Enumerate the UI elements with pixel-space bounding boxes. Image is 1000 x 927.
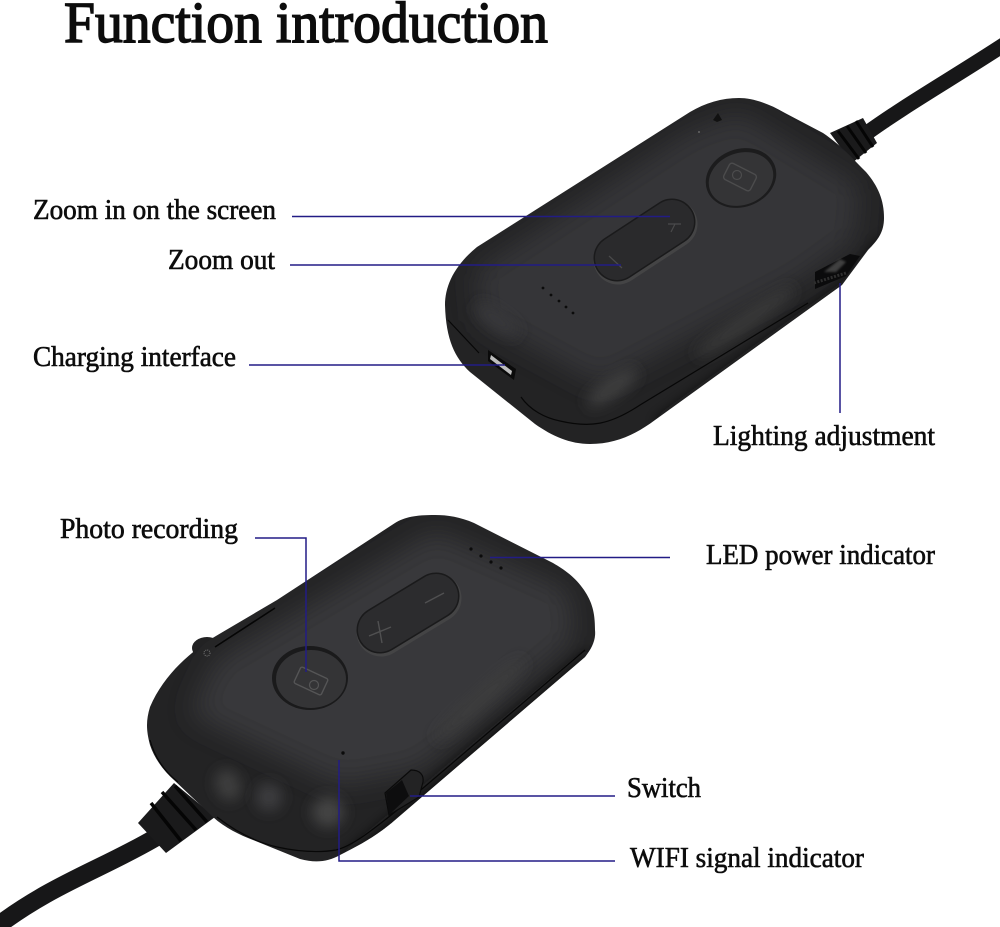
label: Photo recording: Photo recording bbox=[60, 514, 238, 545]
wifi indicator dot bbox=[341, 751, 345, 755]
bottom photo button bbox=[272, 646, 348, 710]
top cable bbox=[860, 44, 1000, 138]
top photo button bbox=[697, 138, 785, 218]
label: Charging interface: Charging interface bbox=[33, 342, 236, 373]
label: Zoom in on the screen: Zoom in on the screen bbox=[33, 195, 276, 226]
bottom side bump bbox=[192, 637, 222, 659]
top wifi mark bbox=[698, 113, 722, 133]
top USB port bbox=[488, 350, 516, 380]
top body bbox=[445, 98, 884, 444]
label: Switch: Switch bbox=[627, 773, 701, 804]
label: Zoom out: Zoom out bbox=[168, 245, 275, 276]
bottom LED dots bbox=[469, 547, 503, 570]
bottom device bbox=[0, 515, 600, 927]
bottom side slot bbox=[204, 608, 275, 656]
top lighting wheel bbox=[814, 254, 860, 289]
leader lines bbox=[249, 216, 840, 861]
bottom body bbox=[147, 515, 595, 861]
bottom seam bbox=[150, 650, 585, 852]
bottom shading bbox=[190, 530, 600, 880]
label: Lighting adjustment: Lighting adjustment bbox=[713, 421, 935, 452]
top strain relief bbox=[830, 118, 877, 163]
label: WIFI signal indicator: WIFI signal indicator bbox=[630, 843, 865, 874]
top shading bbox=[470, 115, 881, 422]
bottom cable bbox=[0, 838, 155, 927]
top device bbox=[445, 44, 1000, 460]
top seam bbox=[448, 303, 808, 424]
bottom switch bbox=[385, 770, 423, 815]
bottom strain relief bbox=[138, 783, 215, 853]
bottom zoom button bbox=[369, 593, 444, 643]
label: LED power indicator: LED power indicator bbox=[706, 540, 936, 571]
top LED dots bbox=[542, 287, 574, 314]
top zoom button bbox=[609, 222, 681, 268]
